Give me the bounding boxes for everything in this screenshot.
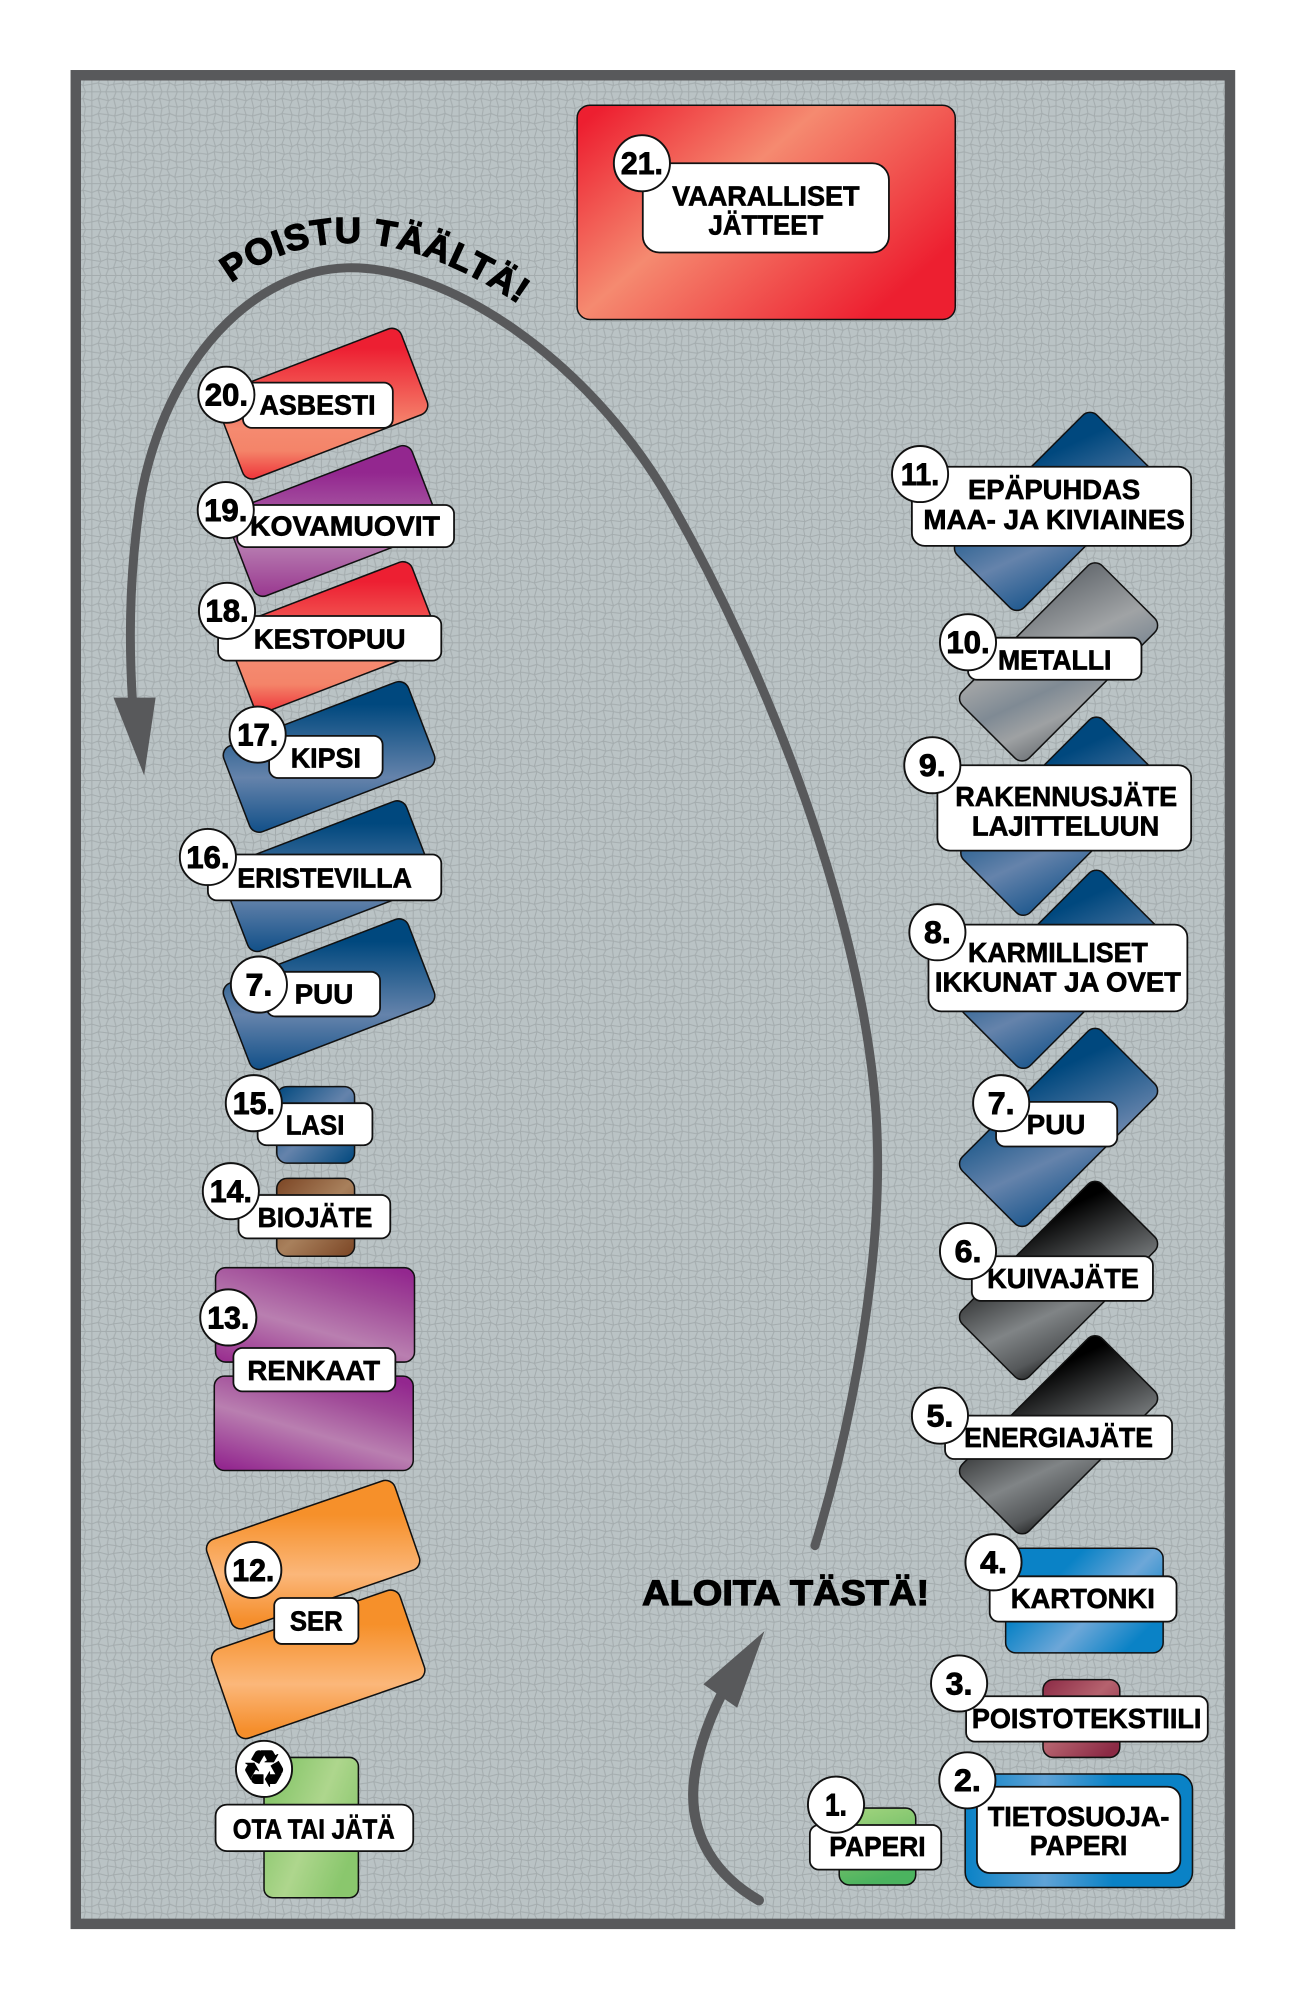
- number badge: [200, 1289, 256, 1345]
- label: [269, 736, 383, 778]
- number badge: 20.: [205, 377, 248, 413]
- number badge: 18.: [205, 593, 249, 629]
- exit text path: [231, 243, 525, 309]
- panel: 1 paperi: [808, 1777, 941, 1885]
- panel: 11 epäpuhdas maa- ja kiviaines: [892, 408, 1191, 615]
- label text: RENKAAT: [247, 1355, 380, 1386]
- number badge: 2.: [954, 1762, 981, 1798]
- label: [239, 1195, 390, 1238]
- panel: 19 kovamuovit: [198, 443, 454, 599]
- card: [955, 1332, 1162, 1538]
- label: [233, 1348, 395, 1391]
- number badge: 12.: [232, 1552, 274, 1588]
- card: [955, 1024, 1162, 1231]
- number badge: 15.: [233, 1085, 275, 1121]
- label text: KOVAMUOVIT: [250, 511, 440, 542]
- number badge: [909, 904, 965, 960]
- number badge: 16.: [186, 839, 230, 875]
- label: [968, 638, 1141, 680]
- number badge: 1.: [825, 1786, 847, 1822]
- panel: 6 kuivajäte: [940, 1177, 1162, 1384]
- number badge: [226, 1075, 282, 1131]
- panel: 8 karmilliset ikkunat ja ovet: [909, 866, 1187, 1073]
- card: [965, 1774, 1192, 1888]
- number badge: 14.: [210, 1173, 252, 1209]
- number badge: [940, 614, 996, 670]
- arrow: start route curve: [693, 1631, 764, 1900]
- label text: ASBESTI: [260, 389, 376, 420]
- number badge: 19.: [204, 492, 247, 528]
- upper card: [216, 1268, 415, 1362]
- icon: recycling badge: ♻: [241, 1741, 287, 1800]
- lower card: [214, 1376, 413, 1470]
- label text: SER: [290, 1606, 343, 1637]
- number badge: 3.: [946, 1665, 972, 1701]
- panel: 17 kipsi: [220, 679, 438, 835]
- label text: KARTONKI: [1011, 1583, 1155, 1614]
- number badge: 11.: [901, 456, 939, 492]
- label: [237, 505, 454, 547]
- number badge: 8.: [924, 914, 951, 950]
- number badge: 13.: [207, 1299, 249, 1335]
- number badge: [931, 1655, 987, 1712]
- card: [277, 1178, 355, 1256]
- number badge: 5.: [927, 1397, 953, 1433]
- number badge: 4.: [980, 1544, 1007, 1580]
- panel: 5 energiajäte: [912, 1332, 1172, 1538]
- panel: 14 biojäte: [203, 1163, 390, 1256]
- number badge: 9.: [919, 747, 946, 783]
- label: [945, 1416, 1172, 1459]
- panel: 7 puu right: [955, 1024, 1162, 1231]
- label text: PAPERI: [1030, 1830, 1127, 1861]
- number badge: [198, 482, 254, 538]
- panel: 15 lasi: [226, 1075, 372, 1163]
- label text: [988, 1801, 1169, 1861]
- arrow: exit route curve: [114, 268, 878, 1546]
- label text: OTA TAI JÄTÄ: [233, 1813, 395, 1844]
- label: [274, 1598, 358, 1644]
- label: [643, 163, 889, 253]
- card: [218, 798, 436, 954]
- label text: METALLI: [998, 645, 1111, 676]
- label: [267, 972, 380, 1016]
- label: [810, 1825, 941, 1870]
- label text: PAPERI: [829, 1831, 926, 1862]
- number badge: 10.: [946, 624, 990, 660]
- label text: JÄTTEET: [708, 210, 823, 241]
- label: [966, 1696, 1208, 1742]
- label text: POISTOTEKSTIILI: [972, 1703, 1201, 1734]
- label text: [923, 474, 1185, 535]
- card: [957, 866, 1163, 1073]
- card: [224, 443, 442, 599]
- label text: LAJITTELUUN: [972, 810, 1159, 841]
- panel: 21 vaaralliset jätteet: [577, 105, 955, 319]
- label text: [955, 781, 1177, 841]
- label text: LASI: [286, 1109, 344, 1140]
- number badge: [904, 737, 960, 793]
- number badge: [180, 829, 236, 885]
- label: [258, 1103, 372, 1145]
- number badge: [892, 446, 948, 502]
- number badge: 17.: [237, 716, 278, 752]
- label: [216, 1805, 413, 1851]
- number badge: [940, 1223, 996, 1279]
- number badge: [939, 1752, 995, 1808]
- label text: KESTOPUU: [254, 624, 406, 655]
- label text: [935, 937, 1181, 998]
- label: [977, 1787, 1180, 1873]
- label: [990, 1576, 1177, 1622]
- number badge: 7.: [988, 1085, 1015, 1121]
- panel: 12 ser: [204, 1478, 428, 1741]
- number badge: 21.: [621, 145, 663, 181]
- number badge: [912, 1388, 968, 1444]
- panel: 13 renkaat: [200, 1268, 415, 1470]
- label: [218, 616, 441, 661]
- label: [996, 1102, 1117, 1147]
- number badge: [198, 367, 254, 423]
- card: [1006, 1548, 1163, 1653]
- label text: KARMILLISET: [968, 937, 1148, 968]
- panel: 16 eristevilla: [180, 798, 441, 954]
- label: [243, 383, 393, 428]
- panel: 4 kartonki: [965, 1534, 1177, 1653]
- number badge: 7.: [246, 966, 272, 1002]
- card: [955, 559, 1162, 765]
- card: [1043, 1680, 1120, 1757]
- label text: TIETOSUOJA-: [988, 1801, 1169, 1832]
- card: [264, 1757, 358, 1898]
- panel: 3 poistotekstiili: [931, 1655, 1208, 1757]
- label text: RAKENNUSJÄTE: [955, 781, 1177, 812]
- label text: ERISTEVILLA: [237, 863, 412, 894]
- heading: start text: ALOITA TÄSTÄ!: [642, 1574, 929, 1613]
- card: [224, 559, 442, 715]
- number badge: [973, 1075, 1029, 1131]
- label text: EPÄPUHDAS: [968, 474, 1140, 505]
- label: [928, 925, 1187, 1011]
- panel: 7 puu left: [220, 916, 438, 1072]
- number badge: 6.: [955, 1233, 981, 1269]
- panel: 20 asbesti: [198, 325, 431, 482]
- label text: VAARALLISET: [672, 180, 860, 211]
- label text: BIOJÄTE: [258, 1202, 372, 1233]
- heading: curved exit text: POISTU TÄÄLTÄ!: [218, 217, 530, 303]
- label text: MAA- JA KIVIAINES: [923, 504, 1185, 535]
- card: [213, 325, 431, 482]
- panel: 9 rakennusjäte lajitteluun: [904, 713, 1191, 919]
- label text: KUIVAJÄTE: [987, 1263, 1139, 1294]
- card: [220, 916, 438, 1072]
- panel: 18 kestopuu: [199, 559, 442, 715]
- label text: IKKUNAT JA OVET: [935, 967, 1181, 998]
- card: [955, 1177, 1162, 1384]
- number badge: [231, 957, 287, 1013]
- label text: KIPSI: [291, 743, 361, 774]
- card: [950, 408, 1157, 615]
- number badge: [614, 135, 670, 191]
- card: [577, 105, 955, 319]
- label: [912, 467, 1191, 546]
- panel: 2 tietosuojapaperi: [939, 1752, 1192, 1888]
- number badge: [230, 707, 286, 763]
- number badge: [965, 1534, 1022, 1590]
- card: [220, 679, 438, 835]
- label text: [672, 180, 860, 241]
- label: [208, 854, 441, 900]
- number badge: [203, 1163, 259, 1219]
- label text: PUU: [295, 979, 353, 1010]
- upper card: [204, 1478, 423, 1632]
- card: [957, 713, 1163, 919]
- lower card: [209, 1587, 428, 1741]
- panel: 10 metalli: [940, 559, 1162, 765]
- label: [972, 1256, 1153, 1301]
- panel: ota tai jätä: [216, 1741, 413, 1898]
- card: [839, 1808, 916, 1885]
- number badge: [199, 583, 255, 639]
- label text: ENERGIAJÄTE: [964, 1422, 1153, 1453]
- number badge: [225, 1542, 281, 1598]
- label: [937, 765, 1191, 851]
- label text: PUU: [1027, 1109, 1085, 1140]
- card: [277, 1087, 355, 1163]
